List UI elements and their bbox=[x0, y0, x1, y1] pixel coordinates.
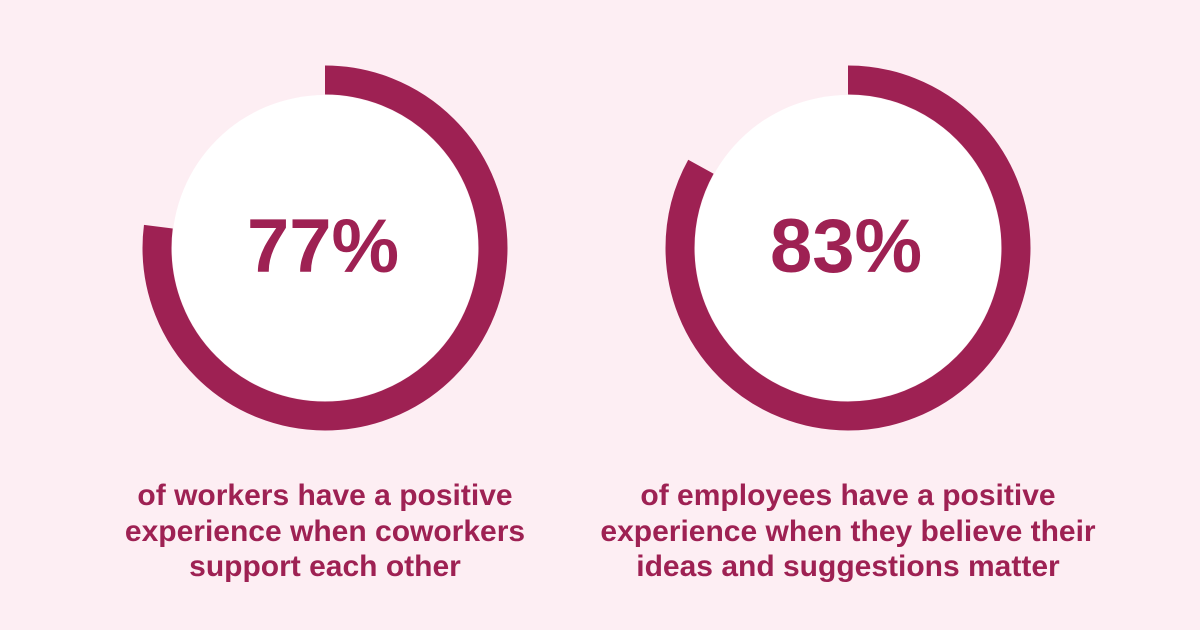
caption right: experience when they believe their bbox=[600, 514, 1096, 548]
donut: 77% bbox=[157, 80, 493, 416]
caption right bbox=[600, 479, 1096, 583]
donut: 77%: 77% bbox=[247, 204, 399, 289]
caption left: support each other bbox=[189, 550, 461, 583]
donut: 83% bbox=[680, 80, 1016, 416]
caption left bbox=[125, 479, 525, 583]
caption right: of employees have a positive bbox=[640, 479, 1056, 512]
caption right: ideas and suggestions matter bbox=[636, 550, 1060, 583]
donut: 83%: 83% bbox=[770, 204, 922, 289]
caption left: experience when coworkers bbox=[125, 514, 525, 548]
caption left: of workers have a positive bbox=[137, 479, 513, 512]
